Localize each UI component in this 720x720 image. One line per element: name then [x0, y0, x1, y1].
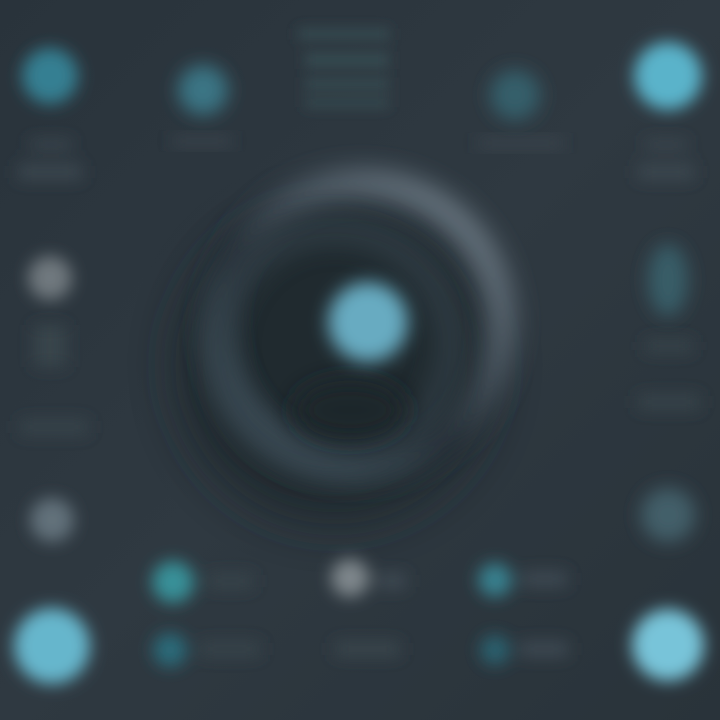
- icon: top fourth circle: [490, 70, 540, 120]
- label: right middle: [638, 340, 700, 409]
- label: left middle: [20, 325, 88, 434]
- icon: top centre list: [298, 28, 390, 108]
- icon: left lower circle: [30, 498, 74, 542]
- label: top second: [172, 136, 232, 146]
- icon: left middle circle: [28, 256, 72, 300]
- label: top right: [638, 140, 694, 179]
- icon: top second circle: [178, 65, 228, 115]
- legend: bottom left group: [152, 561, 260, 667]
- legend: bottom right group: [478, 563, 568, 665]
- icon: bottom right large circle: [632, 609, 704, 681]
- icon: right lower circle: [641, 488, 695, 542]
- icon: top left circle: [22, 48, 78, 104]
- label: top left: [18, 140, 82, 179]
- icon: top right circle: [634, 42, 702, 110]
- icon: bottom left large circle: [14, 608, 90, 684]
- central dial icon: [175, 183, 502, 525]
- icon: right middle capsule: [648, 244, 688, 316]
- legend: bottom centre group: [331, 559, 406, 656]
- label: top fourth: [478, 138, 563, 148]
